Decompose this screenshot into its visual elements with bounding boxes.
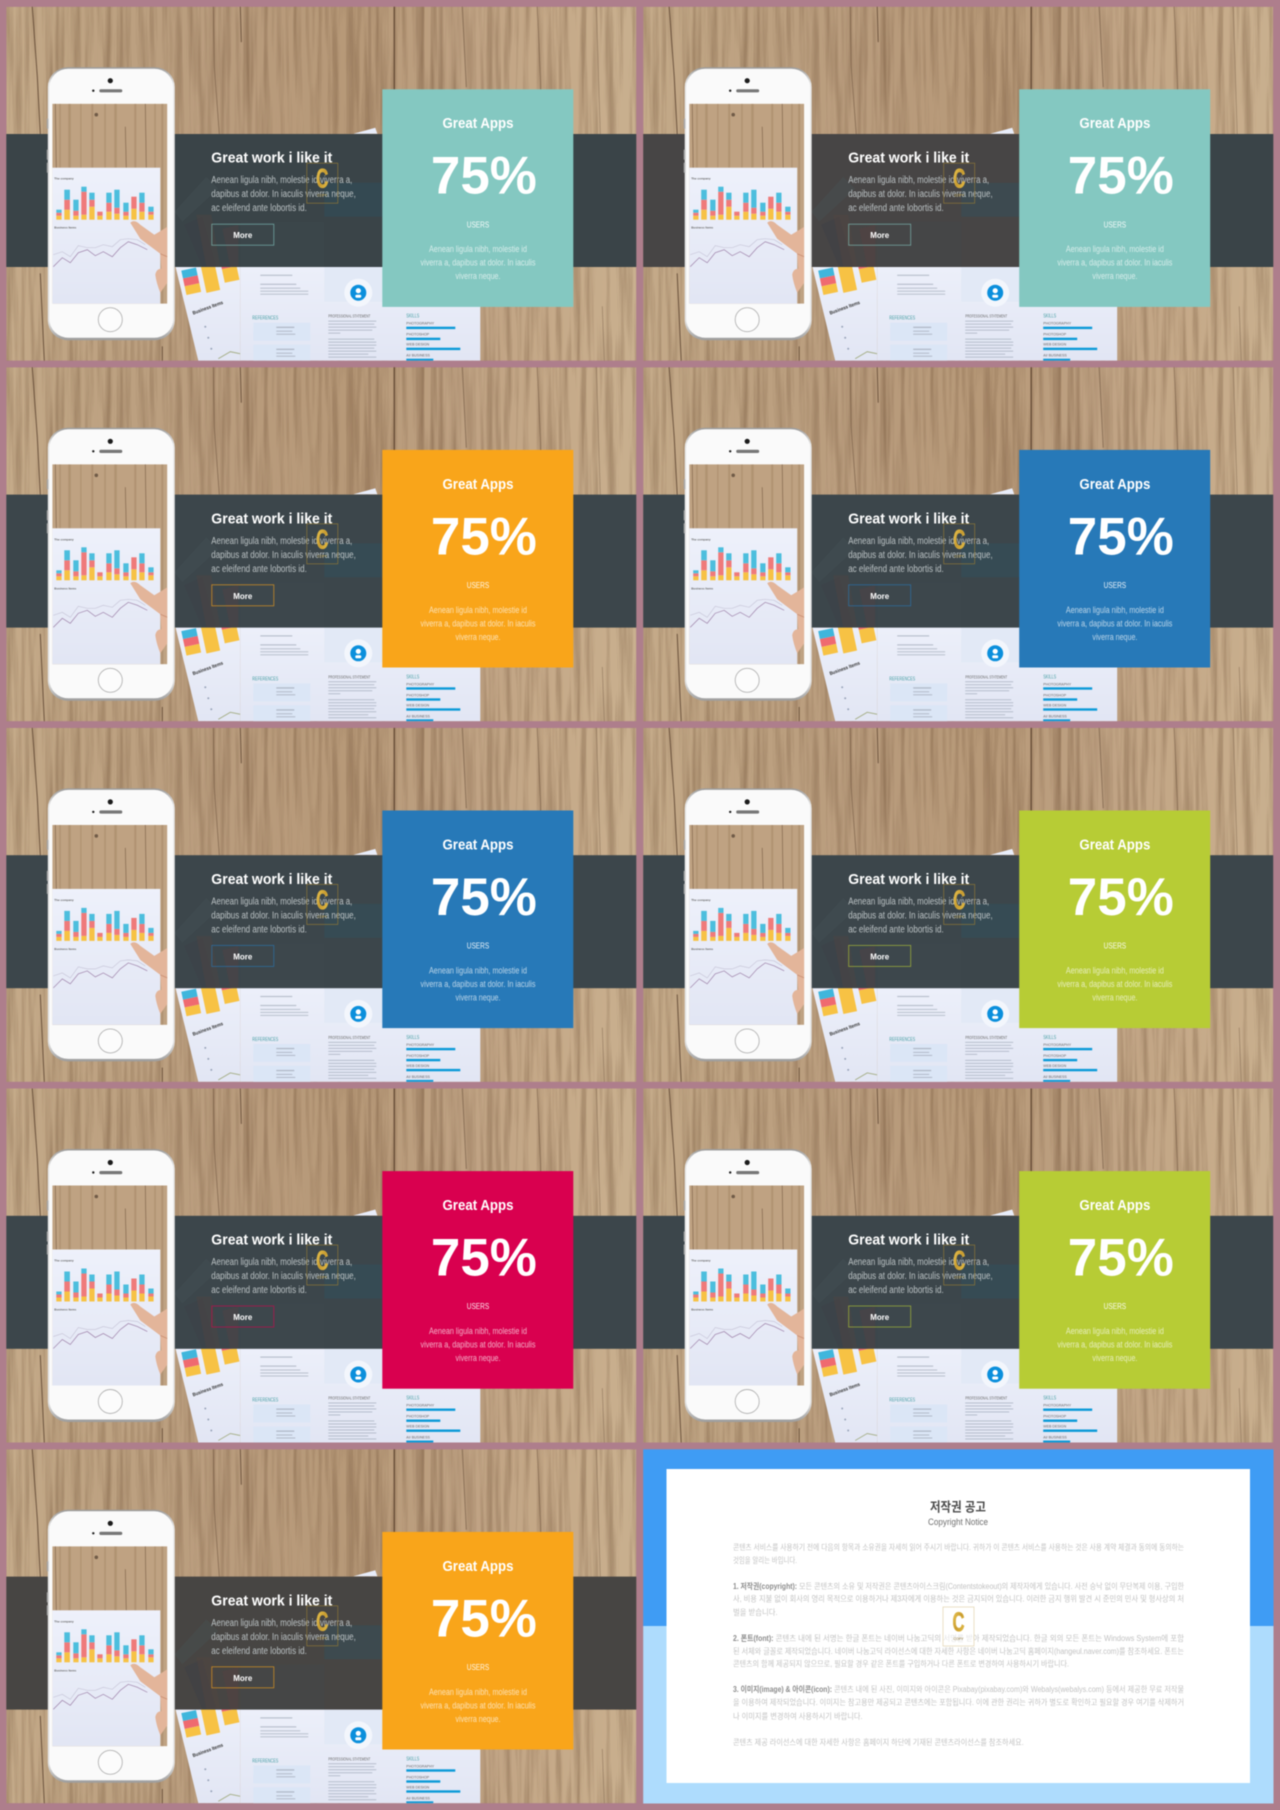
left text block (211, 510, 356, 575)
left text block: dapibus at dolor. In iaculis viverra neque, (211, 550, 356, 561)
left text block: Aenean ligula nibh, molestie id viverra a, (211, 1618, 352, 1629)
notice body text: 콘텐츠 내에 된 서명는 한글 폰트는 네이버 나눔고딕의 서명를 받아 제작되었습니다. 한글 외의 모든 폰트는 Windows System에 포함 (776, 1633, 1185, 1643)
slide 9: orange, grey band (6, 1449, 636, 1803)
button: More (233, 1312, 253, 1322)
stat card: USERS (1104, 942, 1126, 951)
stat card: viverra a, dapibus at dolor. In iaculis (1057, 258, 1173, 268)
watermark: COPY (317, 915, 328, 919)
stat card: Great Apps (443, 477, 514, 493)
stat card: Aenean ligula nibh, molestie id (1066, 1326, 1164, 1336)
stat card: Aenean ligula nibh, molestie id (429, 1326, 527, 1336)
watermark: COPY (317, 554, 328, 558)
watermark (944, 884, 975, 924)
panel: copyright notice (643, 1449, 1274, 1804)
stat card: viverra neque. (1092, 632, 1137, 642)
left text block: ac eleifend ante lobortis id. (848, 564, 944, 575)
watermark: C (316, 1606, 328, 1636)
left text block: ac eleifend ante lobortis id. (211, 1285, 307, 1296)
left text block: ac eleifend ante lobortis id. (848, 924, 944, 935)
stat card: 75% (431, 147, 537, 206)
left text block: Aenean ligula nibh, molestie id viverra a, (211, 536, 352, 547)
left text block: dapibus at dolor. In iaculis viverra neque, (848, 189, 993, 200)
button: More (870, 951, 889, 961)
button: More (870, 591, 889, 601)
stat card: viverra neque. (456, 1353, 501, 1363)
left text block: Great work i like it (848, 1232, 969, 1248)
left text block: Great work i like it (848, 150, 969, 167)
left text block (848, 150, 993, 214)
stat card: viverra a, dapibus at dolor. In iaculis (421, 1700, 536, 1710)
stat card: viverra a, dapibus at dolor. In iaculis (421, 618, 536, 628)
watermark: C (953, 1246, 965, 1276)
left text block: Aenean ligula nibh, molestie id viverra a, (848, 175, 989, 186)
button: More (233, 1673, 253, 1683)
stat card: 75% (431, 1228, 537, 1288)
left text block: Great work i like it (211, 871, 332, 888)
stat card: Aenean ligula nibh, molestie id (429, 965, 527, 975)
notice body text: 3. 이미지(image) & 아이콘(icon): (733, 1684, 832, 1694)
stat card: 75% (1068, 507, 1174, 566)
left text block: Great work i like it (211, 1232, 332, 1248)
left text block: ac eleifend ante lobortis id. (211, 203, 307, 214)
stat card: viverra a, dapibus at dolor. In iaculis (1057, 1340, 1173, 1350)
stat card: USERS (1104, 220, 1126, 229)
stat card (382, 1532, 573, 1750)
notice body text: 콘텐츠 서비스를 사용하기 전에 다음의 항목과 소유권을 자세히 읽어 주시기 바랍니다. 귀하가 이 콘텐츠 서비스를 사용하는 것은 사용 계약 체결과 동의에 동의하는 (733, 1542, 1184, 1552)
button: More (233, 591, 253, 601)
stat card: Aenean ligula nibh, molestie id (1066, 965, 1164, 975)
stat card (1019, 450, 1210, 668)
watermark (943, 1607, 974, 1646)
notice body text: 2. 폰트(font): (733, 1634, 774, 1643)
stat card: Aenean ligula nibh, molestie id (429, 1687, 527, 1697)
left text block: ac eleifend ante lobortis id. (848, 203, 944, 214)
left text block: dapibus at dolor. In iaculis viverra neque, (848, 1271, 993, 1282)
stat card: viverra neque. (1092, 992, 1137, 1002)
left text block: Aenean ligula nibh, molestie id viverra a, (848, 896, 989, 907)
slide 3: orange (6, 367, 636, 721)
button (849, 945, 911, 966)
slide 4: blue (643, 367, 1273, 721)
slide 5: blue (6, 728, 636, 1082)
stat card: viverra neque. (1092, 1353, 1137, 1363)
watermark: COPY (317, 194, 328, 198)
stat card: viverra neque. (456, 992, 501, 1002)
watermark: COPY (954, 915, 965, 919)
stat card (382, 810, 573, 1028)
watermark: C (316, 524, 328, 554)
left text block (211, 150, 356, 214)
stat card (1019, 810, 1210, 1028)
watermark: C (953, 885, 965, 915)
button: More (870, 1312, 889, 1322)
left text block: dapibus at dolor. In iaculis viverra neque, (211, 189, 356, 200)
stat card: USERS (467, 1663, 489, 1672)
button (212, 1306, 274, 1327)
watermark: C (952, 1607, 964, 1637)
left text block: ac eleifend ante lobortis id. (211, 924, 307, 935)
left text block (211, 1592, 356, 1657)
watermark: COPY (317, 1276, 328, 1280)
left text block: dapibus at dolor. In iaculis viverra neque, (211, 1632, 356, 1643)
stat card: viverra neque. (456, 271, 501, 281)
watermark (307, 1606, 338, 1646)
stat card: 75% (1068, 868, 1174, 927)
left text block: Aenean ligula nibh, molestie id viverra a, (211, 175, 352, 186)
left text block: dapibus at dolor. In iaculis viverra neque, (848, 550, 993, 561)
stat card: Aenean ligula nibh, molestie id (1066, 244, 1164, 254)
left text block: Aenean ligula nibh, molestie id viverra a, (211, 896, 352, 907)
slide 8: lime (643, 1088, 1273, 1442)
notice body text: 콘텐츠의 함께 제공되지 않으므로, 필요할 경우 같은 폰트를 구입하거나 다른 폰트로 변경하여 사용하시기 바랍니다. (733, 1658, 1069, 1668)
left text block: Great work i like it (211, 1592, 332, 1609)
button (849, 1306, 911, 1327)
watermark: COPY (954, 1637, 964, 1641)
stat card: viverra a, dapibus at dolor. In iaculis (421, 258, 536, 268)
stat card: Great Apps (1079, 837, 1150, 853)
stat card: viverra neque. (456, 632, 501, 642)
stat card (382, 1171, 573, 1389)
watermark (944, 1245, 975, 1285)
notice body text: 된 서체와 글꼴로 제작되었습니다. 네이버 나눔고딕 라이선스에 대한 자세한 사항은 네이버 나눔고딕 홈페이지(hangeul.naver.com)를 참조하세요. 폰트는 (733, 1646, 1184, 1656)
stat card: Aenean ligula nibh, molestie id (429, 605, 527, 615)
button (212, 224, 274, 245)
stat card: Great Apps (443, 837, 514, 853)
stat card: Great Apps (1079, 477, 1150, 493)
left text block (848, 871, 993, 935)
left text block: Great work i like it (211, 510, 332, 527)
watermark: C (316, 164, 328, 194)
watermark (307, 524, 338, 564)
button (849, 224, 911, 245)
stat card: 75% (431, 1589, 537, 1648)
notice heading: 저작권 공고 (930, 1500, 986, 1514)
stat card: Great Apps (443, 116, 514, 132)
button (212, 585, 274, 606)
stat card: Great Apps (443, 1198, 514, 1214)
watermark: C (316, 885, 328, 915)
watermark: C (953, 524, 965, 554)
left text block: Great work i like it (848, 510, 969, 527)
stat card: 75% (1068, 1228, 1174, 1288)
notice body text (733, 1542, 1185, 1747)
watermark (307, 884, 338, 924)
button (849, 585, 911, 606)
left text block: dapibus at dolor. In iaculis viverra neque, (848, 910, 993, 921)
stat card (382, 450, 573, 668)
stat card: Aenean ligula nibh, molestie id (429, 244, 527, 254)
stat card (1019, 89, 1210, 307)
notice body text: 1. 저작권(copyright): (733, 1581, 797, 1591)
notice body text: 나 이미지를 변경하여 사용하시기 바랍니다. (733, 1711, 862, 1721)
stat card: Great Apps (443, 1559, 514, 1575)
stat card (1019, 1171, 1210, 1389)
stat card: USERS (467, 1302, 489, 1311)
stat card (382, 89, 573, 307)
left text block (211, 1232, 356, 1296)
stat card: viverra a, dapibus at dolor. In iaculis (421, 1340, 536, 1350)
button: More (870, 230, 889, 240)
watermark: COPY (954, 1276, 965, 1280)
notice body text: 콘텐츠 내에 된 사진, 이미지와 아이콘은 Pixabay(pixabay.com)와 Webalys(webalys.com) 등에서 제공한 무료 저작물 (834, 1684, 1184, 1694)
notice body text: 모든 콘텐츠의 소유 및 저작권은 콘텐츠아이스크림(Contentstokeout)의 제작자에게 있습니다. 사전 승낙 없이 무단복제 이용, 구입한 (799, 1581, 1185, 1591)
left text block: Great work i like it (848, 871, 969, 888)
notice body text: 콘텐츠 제공 라이선스에 대한 자세한 사항은 홈페이지 하단에 기재된 콘텐츠라이선스를 참조하세요. (733, 1737, 1024, 1747)
button: More (233, 951, 253, 961)
stat card: viverra neque. (1092, 271, 1137, 281)
watermark (307, 1245, 338, 1285)
stat card: viverra a, dapibus at dolor. In iaculis (1057, 618, 1173, 628)
watermark (944, 524, 975, 564)
watermark: C (953, 164, 965, 194)
stat card: USERS (1104, 581, 1126, 590)
left text block: Aenean ligula nibh, molestie id viverra a, (848, 536, 989, 547)
watermark: C (316, 1246, 328, 1276)
slide 7: crimson (6, 1088, 636, 1442)
watermark: COPY (317, 1636, 328, 1640)
notice body text: 벌을 받습니다. (733, 1607, 778, 1617)
left text block: ac eleifend ante lobortis id. (211, 564, 307, 575)
stat card: Aenean ligula nibh, molestie id (1066, 605, 1164, 615)
stat card: USERS (1104, 1302, 1126, 1311)
watermark (944, 163, 975, 203)
watermark: COPY (954, 554, 965, 558)
button (212, 945, 274, 966)
left text block: Great work i like it (211, 150, 332, 167)
stat card: USERS (467, 220, 489, 229)
left text block: dapibus at dolor. In iaculis viverra neque, (211, 1271, 356, 1282)
watermark (307, 163, 338, 203)
slide 2: teal, grey band (643, 7, 1273, 361)
stat card: 75% (1068, 147, 1174, 206)
slide 1: teal (6, 7, 636, 361)
button (212, 1667, 274, 1688)
stat card: viverra neque. (456, 1714, 501, 1724)
left text block: dapibus at dolor. In iaculis viverra neque, (211, 910, 356, 921)
left text block: Aenean ligula nibh, molestie id viverra a, (848, 1257, 989, 1268)
stat card: Great Apps (1079, 116, 1150, 132)
left text block: ac eleifend ante lobortis id. (848, 1285, 944, 1296)
notice body text: 을 이용하여 제작되었습니다. 이미지는 참고용만 제공되고 콘텐츠에는 포함됩니다. 이에 관한 권리는 귀하가 별도로 확인하고 필요할 경우 여기를 삭제하거 (733, 1697, 1184, 1707)
left text block: ac eleifend ante lobortis id. (211, 1646, 307, 1657)
left text block (848, 510, 993, 575)
stat card: USERS (467, 942, 489, 951)
notice heading (928, 1500, 988, 1527)
notice heading: Copyright Notice (928, 1517, 988, 1527)
button: More (233, 230, 253, 240)
stat card: viverra a, dapibus at dolor. In iaculis (1057, 979, 1173, 989)
notice body text: 것임을 알리는 바입니다. (733, 1555, 797, 1565)
notice body text: 사, 비용 지불 없이 회사의 영리 목적으로 이용하거나 제3자에게 이용하는 것은 금지되어 있습니다. 이러한 금지 행위 발견 시 준민의 민사 및 형사상의 처 (733, 1594, 1184, 1604)
left text block (848, 1232, 993, 1296)
slide 6: lime (643, 728, 1273, 1082)
stat card: 75% (431, 507, 537, 566)
stat card: viverra a, dapibus at dolor. In iaculis (421, 979, 536, 989)
left text block (211, 871, 356, 935)
watermark: COPY (954, 194, 965, 198)
stat card: 75% (431, 868, 537, 927)
left text block: Aenean ligula nibh, molestie id viverra a, (211, 1257, 352, 1268)
stat card: USERS (467, 581, 489, 590)
stat card: Great Apps (1079, 1198, 1150, 1214)
